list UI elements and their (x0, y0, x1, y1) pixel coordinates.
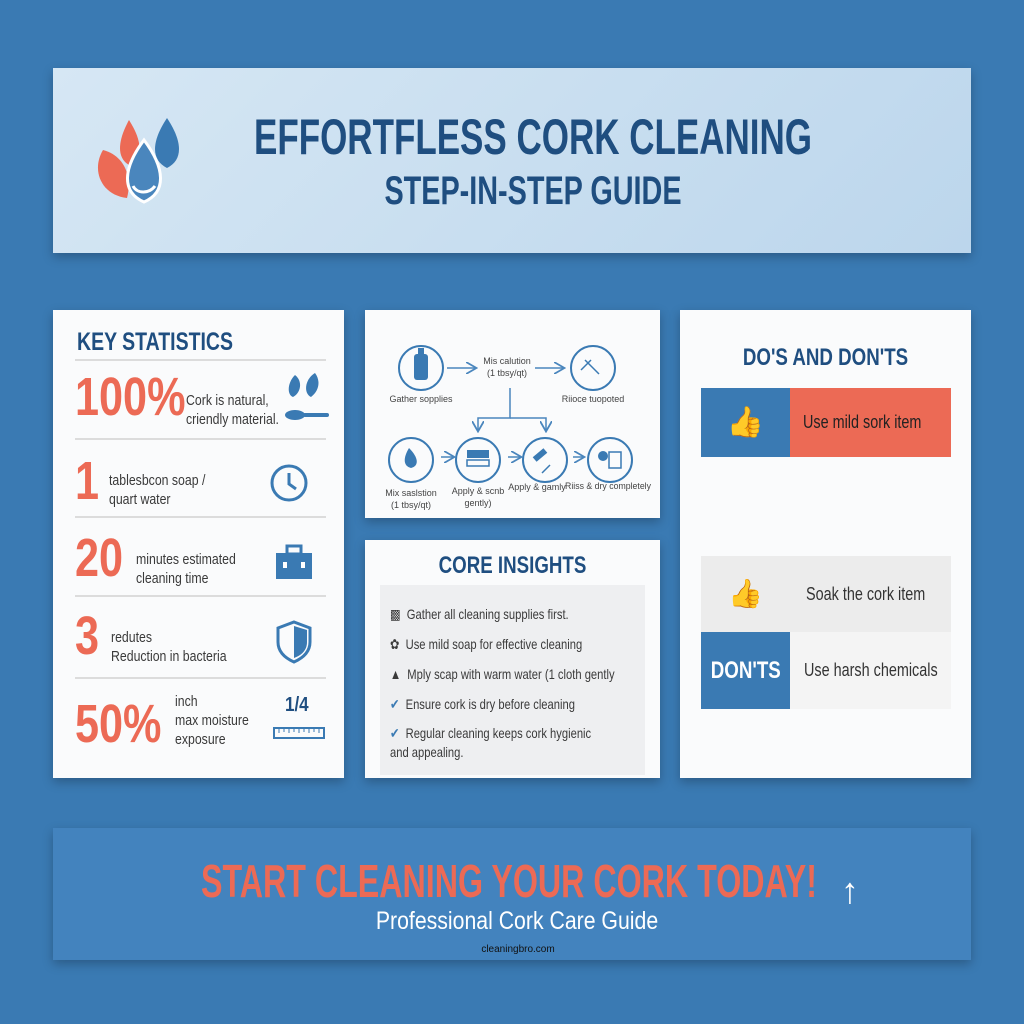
panel: dos and donts (680, 310, 971, 778)
stat 3: redutes (111, 629, 152, 646)
insights list: ✔ Ensure cork is dry before cleaning (390, 696, 575, 712)
stat 100%: Cork is natural, (186, 392, 269, 409)
heading: key statistics: KEY STATISTICS (77, 328, 233, 356)
stat 1: 1 (75, 451, 99, 511)
donts row: Use harsh chemicals (804, 660, 938, 680)
heading: core insights: CORE INSIGHTS (439, 552, 586, 579)
insights list: ✿ Use mild soap for effective cleaning (390, 636, 582, 652)
stat 50% (75, 693, 325, 754)
stat 20: cleaning time (136, 570, 208, 587)
panel: process flow: Gather sopplies (389, 394, 453, 404)
panel: process flow: Apply & scnb (452, 486, 504, 496)
insights list: ▩ Gather all cleaning supplies first. (390, 606, 569, 622)
soak row: 👍 (728, 578, 763, 609)
stat 3: 3 (75, 606, 99, 666)
stat 3 (75, 606, 312, 666)
panel: process flow: gently) (464, 498, 492, 508)
panel: process flow: Riioce tuopoted (562, 394, 624, 404)
header banner (53, 68, 971, 253)
title (254, 109, 812, 213)
icon: arrow up: ↑ (841, 870, 859, 911)
panel: process flow (365, 310, 660, 518)
stat 20: minutes estimated (136, 551, 236, 568)
cta heading: START CLEANING YOUR CORK TODAY! (201, 855, 817, 907)
insights list: ✔ Regular cleaning keeps cork hygienic (390, 725, 591, 741)
panel: process flow: Riiss & dry completely (565, 481, 651, 491)
stat 50%: inch (175, 693, 198, 710)
panel: process flow: Mis calution (483, 356, 531, 366)
donts row (701, 632, 951, 709)
stat 100% (75, 367, 329, 428)
insights list: ▲ Mply scap with warm water (1 cloth gently (390, 666, 615, 682)
stat 100%: criendly material. (186, 411, 279, 428)
heading: dos and donts: DO'S AND DON'TS (743, 344, 908, 371)
stat 1 (75, 451, 308, 511)
stat 100%: 100% (75, 367, 186, 427)
panel: core insights (365, 540, 660, 778)
bottom banner (53, 828, 971, 960)
panel: process flow: Mix saslstion (385, 488, 437, 498)
stat 20 (75, 528, 312, 588)
stat 3: Reduction in bacteria (111, 648, 227, 665)
title: EFFORTFLESS CORK CLEANING (254, 109, 812, 165)
panel: process flow: (1 tbsy/qt) (487, 368, 527, 378)
stat 50%: 1/4 (285, 694, 309, 716)
footer url: cleaningbro.com (481, 944, 555, 955)
subtitle: Professional Cork Care Guide (376, 907, 658, 935)
title: STEP-IN-STEP GUIDE (384, 169, 682, 213)
do row: 👍 (727, 406, 764, 439)
soak row (701, 556, 951, 632)
icon: leaves and drops (98, 118, 179, 204)
stat 50%: max moisture (175, 712, 249, 729)
donts row: DON'TS (711, 657, 781, 684)
stat 1: quart water (109, 491, 171, 508)
panel: key statistics (53, 310, 344, 778)
stat 50%: 50% (75, 694, 161, 754)
soak row: Soak the cork item (806, 584, 925, 604)
stat 50%: exposure (175, 731, 226, 748)
panel: process flow: Apply & gamly (508, 482, 566, 492)
insights list (380, 585, 645, 775)
do row: Use mild sork item (803, 412, 921, 432)
insights list: and appealing. (390, 744, 464, 760)
do row (701, 388, 951, 457)
stat 20: 20 (75, 528, 123, 588)
panel: process flow: (1 tbsy/qt) (391, 500, 431, 510)
stat 1: tablesbcon soap / (109, 472, 205, 489)
